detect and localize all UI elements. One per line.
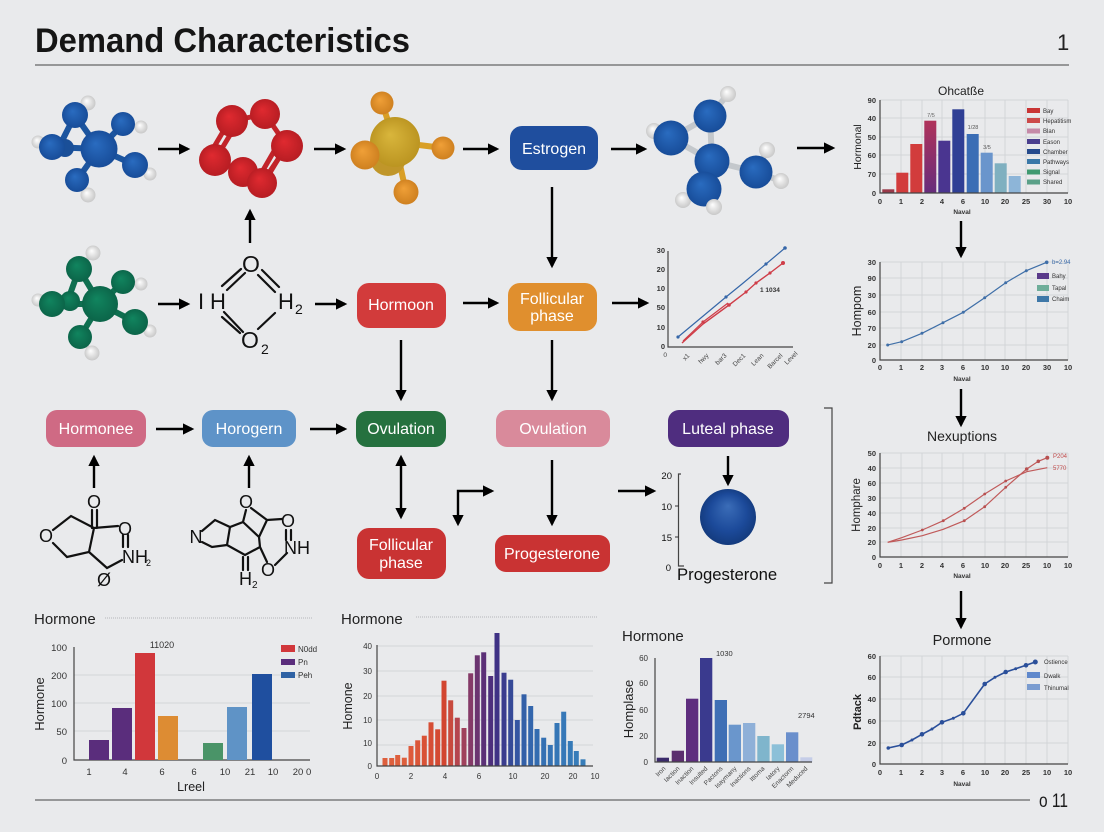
chart: bottom left bar chart: N0dd xyxy=(298,645,317,654)
progesterone gauge with sphere: 10 xyxy=(661,502,672,513)
chart: mini line chart: 50 xyxy=(657,303,665,312)
chart: top right bar chart: 90 xyxy=(868,96,876,105)
chart: top right bar chart: 60 xyxy=(868,151,876,160)
node: Luteal phase xyxy=(668,410,789,447)
chart: right line chart 2: 10 xyxy=(1001,363,1009,372)
chart: bottom left bar chart: 11020 xyxy=(150,640,174,650)
chart: top right bar chart: Naval xyxy=(953,209,971,216)
chart: bottom middle histogram: 2 xyxy=(409,772,414,781)
chart: top right bar chart: 6 xyxy=(961,197,965,206)
structure: right ring: H xyxy=(239,569,252,589)
structure: O H H2 O2: 2 xyxy=(295,301,303,317)
chart: bottom left bar chart: 10 xyxy=(220,767,230,778)
chart: top right bar chart: Signal xyxy=(1043,170,1060,176)
chart: bottom left bar chart: 20 0 xyxy=(293,767,311,778)
chart: bottom right bar chart: 2794 xyxy=(798,711,815,720)
structure: left ring xyxy=(39,492,151,590)
structure: right ring xyxy=(190,492,310,591)
chart: bottom right bar chart: 60 xyxy=(639,706,649,715)
chart: mini line chart: hwy xyxy=(697,352,711,366)
structure: O H H2 O2: I xyxy=(198,289,204,314)
chart: bottom middle histogram: 10 xyxy=(363,739,373,748)
progesterone gauge with sphere: Progesterone xyxy=(677,565,777,584)
chart: bottom left bar chart: Hormone xyxy=(34,611,96,628)
chart: right line chart 2: 90 xyxy=(868,274,876,283)
chart: right line chart 4: 0 xyxy=(872,760,876,769)
chart: bottom middle histogram: 10 xyxy=(363,716,373,725)
chart: bottom right bar chart: 20 xyxy=(639,732,649,741)
chart: bottom middle histogram: 30 xyxy=(363,667,373,676)
chart: right line chart 4: Naval xyxy=(953,781,971,788)
chart: right line chart 3: 2 xyxy=(920,561,924,570)
chart: top right bar chart: Shared xyxy=(1043,180,1062,186)
footer page number: o 11 xyxy=(1039,790,1068,812)
chart: bottom right bar chart: Pactons xyxy=(703,765,725,787)
chart: right line chart 4: 6 xyxy=(961,768,965,777)
chart: top right bar chart: Ohcatße xyxy=(938,84,984,98)
chart: bottom right bar chart: Hormone xyxy=(622,628,684,645)
chart: top right bar chart: 30 xyxy=(1043,197,1051,206)
structure: left ring: O xyxy=(39,526,53,546)
node: Hormoon xyxy=(357,283,446,328)
chart: bottom left bar chart: 1 xyxy=(86,767,92,778)
molecule: blue xyxy=(32,96,156,202)
structure: O H H2 O2 xyxy=(198,251,303,357)
chart: mini line chart: Barcel xyxy=(766,352,785,370)
node: Horogern xyxy=(202,410,296,447)
chart: right line chart 3: Nexuptions xyxy=(927,428,997,444)
chart: bottom left bar chart: Pn xyxy=(298,658,308,667)
chart: right line chart 3: 1 xyxy=(899,561,903,570)
chart: top right bar chart: Hormonal xyxy=(852,124,864,170)
chart: bottom left bar chart: Peh xyxy=(298,671,312,680)
chart: right line chart 3: 30 xyxy=(868,494,876,503)
node: Follicular phase xyxy=(508,283,597,331)
node: Follicular phase red: phase xyxy=(379,555,423,572)
chart: right line chart 2: Chaim xyxy=(1052,297,1069,303)
chart: mini line chart: 30 xyxy=(657,246,665,255)
chart: top right bar chart: 70 xyxy=(868,170,876,179)
structure: O H H2 O2: 2 xyxy=(261,341,269,357)
chart: top right bar chart: 10 xyxy=(1064,197,1072,206)
chart: bottom right bar chart xyxy=(621,628,815,790)
node: Follicular phase red xyxy=(357,528,446,579)
chart: right line chart 3: 50 xyxy=(868,449,876,458)
chart: bottom left bar chart: 200 xyxy=(51,671,67,682)
chart: right line chart 2: 20 xyxy=(868,341,876,350)
structure: left ring: 2 xyxy=(146,558,151,568)
node: Luteal phase: Luteal phase xyxy=(682,421,774,438)
chart: bottom middle histogram: 4 xyxy=(443,772,448,781)
chart: bottom right bar chart: Ittoma xyxy=(749,765,767,783)
chart: top right bar chart: Bay xyxy=(1043,109,1053,115)
chart: top right bar chart: Eason xyxy=(1043,140,1060,146)
chart: right line chart 2: 60 xyxy=(868,308,876,317)
chart: right line chart 4: 0 xyxy=(878,768,882,777)
structure: O H H2 O2: O xyxy=(242,251,260,277)
node: Hormonee: Hormonee xyxy=(59,421,133,438)
chart: right line chart 4: Dwalk xyxy=(1044,674,1061,680)
chart: right line chart 4: Pormone xyxy=(933,633,991,649)
chart: top right bar chart: Blan xyxy=(1043,129,1055,135)
chart: right line chart 4: 3 xyxy=(940,768,944,777)
chart: top right bar chart: 0 xyxy=(872,189,876,198)
node: Hormoon: Hormoon xyxy=(368,297,434,314)
chart: right line chart 4: 2 xyxy=(920,768,924,777)
node: Ovulation pink xyxy=(496,410,610,447)
chart: right line chart 2: 2 xyxy=(920,363,924,372)
chart: right line chart 2: b=2.94 xyxy=(1052,260,1071,266)
chart: top right bar chart: 4 xyxy=(940,197,945,206)
chart: right line chart 2: Naval xyxy=(953,376,971,383)
chart: top right bar chart: 1 xyxy=(899,197,903,206)
chart: mini line chart: bar3 xyxy=(714,352,729,367)
chart: right line chart 2: 20 xyxy=(1022,363,1030,372)
chart: top right bar chart: 10 xyxy=(981,197,989,206)
chart: bottom middle histogram: 20 xyxy=(569,772,578,781)
chart: bottom right bar chart: Iron xyxy=(655,765,668,778)
page number: 1 xyxy=(1057,30,1069,55)
chart: right line chart 4: 10 xyxy=(1064,768,1072,777)
molecule: green xyxy=(32,246,156,360)
node: Hormonee xyxy=(46,410,146,447)
chart: top right bar chart: 1/28 xyxy=(968,125,978,131)
chart: mini line chart: 10 xyxy=(657,323,665,332)
chart: right line chart 3: P204 xyxy=(1053,454,1068,460)
chart: right line chart 3: 0 xyxy=(878,561,882,570)
node: Ovulation green: Ovulation xyxy=(367,421,435,438)
chart: bottom right bar chart: 0 xyxy=(644,758,649,767)
footer rule xyxy=(35,799,1030,801)
structure: left ring: O xyxy=(87,492,101,512)
chart: right line chart 3: Homphare xyxy=(851,478,863,532)
chart: right line chart 3 xyxy=(851,428,1072,580)
chart: right line chart 2: Tapal xyxy=(1052,286,1066,292)
chart: bottom right bar chart: Homplase xyxy=(621,680,636,738)
chart: right line chart 4: Thinumal xyxy=(1044,686,1069,692)
chart: right line chart 3: 20 xyxy=(1001,561,1009,570)
chart: right line chart 4: 20 xyxy=(868,739,876,748)
chart: top right bar chart: Chamber xyxy=(1043,150,1068,156)
node: Ovulation green xyxy=(356,411,446,447)
chart: bottom left bar chart: Lreel xyxy=(177,780,205,794)
chart: right line chart 2: 0 xyxy=(878,363,882,372)
chart: top right bar chart xyxy=(852,84,1072,216)
chart: right line chart 2: 6 xyxy=(961,363,965,372)
chart: bottom left bar chart: 4 xyxy=(122,767,128,778)
chart: right line chart 3: 6 xyxy=(961,561,965,570)
chart: bottom right bar chart: 60 xyxy=(639,679,649,688)
chart: bottom middle histogram: Hormone xyxy=(341,611,403,628)
structure: left ring: Ø xyxy=(97,570,111,590)
chart: right line chart 4: Ostience xyxy=(1044,660,1068,666)
chart: right line chart 3: 40 xyxy=(868,509,876,518)
structure: O H H2 O2: O xyxy=(241,327,259,353)
chart: bottom right bar chart: Iaction xyxy=(663,765,682,784)
chart: bottom left bar chart: 100 xyxy=(51,699,67,710)
chart: right line chart 2: 30 xyxy=(868,291,876,300)
chart: bottom right bar chart: Iatory xyxy=(765,765,782,782)
chart: top right bar chart: 3/5 xyxy=(983,145,991,151)
chart: mini line chart: Lean xyxy=(750,352,766,368)
chart: bottom right bar chart: 60 xyxy=(639,654,649,663)
chart: bottom middle histogram xyxy=(341,611,600,781)
chart: top right bar chart: 25 xyxy=(1022,197,1030,206)
chart: right line chart 3: 40 xyxy=(868,464,876,473)
molecule: gold xyxy=(350,92,454,204)
chart: right line chart 3: Naval xyxy=(953,573,971,580)
chart: bottom middle histogram: 20 xyxy=(541,772,550,781)
chart: bottom left bar chart xyxy=(32,611,317,794)
chart: right line chart 2: 10 xyxy=(1064,363,1072,372)
node: Follicular phase red: Follicular xyxy=(369,537,434,554)
chart: mini line chart: 0 xyxy=(661,342,665,351)
chart: right line chart 4: 40 xyxy=(868,695,876,704)
chart: right line chart 3: 10 xyxy=(981,561,989,570)
structure: right ring: NH xyxy=(284,538,310,558)
title: Demand Characteristics xyxy=(35,22,410,60)
chart: right line chart 3: 4 xyxy=(940,561,945,570)
chart: bottom left bar chart: 21 xyxy=(245,767,255,778)
chart: bottom left bar chart: 50 xyxy=(56,727,67,738)
chart: top right bar chart: 40 xyxy=(868,114,876,123)
molecule: red ring xyxy=(199,99,303,198)
chart: right line chart 2: 1 xyxy=(899,363,903,372)
structure: right ring: O xyxy=(281,511,295,531)
chart: mini line chart: Dec1 xyxy=(732,352,748,368)
chart: bottom middle histogram: Homone xyxy=(341,682,355,730)
node: Ovulation pink: Ovulation xyxy=(519,421,587,438)
structure: O H H2 O2: H xyxy=(210,289,226,314)
structure: O H H2 O2: H xyxy=(278,289,294,314)
node: Follicular phase: Follicular xyxy=(520,291,585,308)
chart: mini line chart: 0 xyxy=(663,352,667,359)
node: Estrogen xyxy=(510,126,598,170)
chart: bottom left bar chart: Hormone xyxy=(32,677,47,731)
chart: top right bar chart: Hepatitism xyxy=(1043,119,1071,125)
structure: right ring: O xyxy=(261,560,275,580)
chart: right line chart 2: 10 xyxy=(981,363,989,372)
chart: bottom right bar chart: Isaymany xyxy=(714,765,739,790)
arrows xyxy=(94,148,961,627)
chart: right line chart 2: 30 xyxy=(1043,363,1051,372)
chart: mini line chart: 1 1034 xyxy=(760,287,780,294)
chart: bottom middle histogram: 20 xyxy=(363,692,373,701)
chart: mini line chart: x1 xyxy=(682,352,692,362)
chart: top right bar chart: 2 xyxy=(920,197,924,206)
chart: bottom middle histogram: 6 xyxy=(477,772,482,781)
chart: top right bar chart: 20 xyxy=(1001,197,1009,206)
structure: right ring: 2 xyxy=(252,580,258,591)
node: Follicular phase: phase xyxy=(530,308,574,325)
chart: bottom right bar chart: Inactions xyxy=(729,765,753,789)
chart: right line chart 4: 20 xyxy=(1001,768,1009,777)
chart: right line chart 3: 60 xyxy=(868,479,876,488)
chart: right line chart 4: 60 xyxy=(868,652,876,661)
chart: mini line chart xyxy=(657,246,800,370)
progesterone gauge with sphere: 0 xyxy=(666,563,671,574)
chart: bottom middle histogram: 0 xyxy=(368,762,373,771)
chart: right line chart 3: 5770 xyxy=(1053,466,1067,472)
chart: top right bar chart: 0 xyxy=(878,197,882,206)
chart: bottom right bar chart: Inaction xyxy=(674,765,696,787)
progesterone gauge with sphere: 20 xyxy=(661,471,672,482)
chart: right line chart 4: 1 xyxy=(899,768,903,777)
chart: bottom left bar chart: 6 xyxy=(159,767,165,778)
node: Horogern: Horogern xyxy=(216,421,282,438)
chart: bottom left bar chart: 10 xyxy=(268,767,278,778)
structure: right ring: N xyxy=(190,527,202,547)
node: Progesterone: Progesterone xyxy=(504,546,600,563)
chart: mini line chart: 20 xyxy=(657,265,665,274)
molecule: blue and white xyxy=(646,86,789,215)
chart: mini line chart: Level xyxy=(783,350,800,366)
chart: bottom right bar chart: 1030 xyxy=(716,649,733,658)
chart: bottom right bar chart: Insulted xyxy=(688,765,710,787)
chart: top right bar chart: Pathways xyxy=(1043,160,1069,166)
structure: left ring: O xyxy=(118,519,132,539)
chart: top right bar chart: 7/5 xyxy=(927,113,935,119)
progesterone gauge with sphere xyxy=(661,471,777,584)
chart: bottom middle histogram: 40 xyxy=(363,642,373,651)
chart: right line chart 2: Hompom xyxy=(850,286,864,336)
chart: bottom right bar chart: Enactorm xyxy=(771,765,795,790)
node: Estrogen: Estrogen xyxy=(522,141,586,158)
chart: bottom right bar chart: Meduced xyxy=(786,765,810,789)
structure: right ring: O xyxy=(239,492,253,512)
progesterone gauge with sphere: 15 xyxy=(661,533,672,544)
chart: right line chart 2: 70 xyxy=(868,324,876,333)
chart: right line chart 4: 10 xyxy=(981,768,989,777)
structure: left ring: NH xyxy=(122,547,148,567)
chart: top right bar chart: 50 xyxy=(868,133,876,142)
chart: bottom middle histogram: 0 xyxy=(375,772,380,781)
chart: bottom left bar chart: 100 xyxy=(51,643,67,654)
chart: right line chart 3: 0 xyxy=(872,553,876,562)
chart: right line chart 2: 3 xyxy=(940,363,944,372)
chart: right line chart 4: 25 xyxy=(1022,768,1030,777)
chart: right line chart 4: Pdtack xyxy=(852,693,864,730)
chart: bottom left bar chart: 0 xyxy=(62,756,67,767)
chart: right line chart 3: 20 xyxy=(868,524,876,533)
chart: bottom middle histogram: 10 xyxy=(509,772,518,781)
chart: right line chart 3: 10 xyxy=(1064,561,1072,570)
chart: right line chart 3: 20 xyxy=(868,538,876,547)
chart: right line chart 3: 25 xyxy=(1022,561,1030,570)
chart: bottom middle histogram: 10 xyxy=(591,772,600,781)
chart: right line chart 4: 60 xyxy=(868,673,876,682)
chart: right line chart 2: 30 xyxy=(868,258,876,267)
chart: right line chart 2: 0 xyxy=(872,356,876,365)
chart: right line chart 2: Bahy xyxy=(1052,274,1066,280)
chart: right line chart 4: 60 xyxy=(868,717,876,726)
chart: right line chart 4: 10 xyxy=(1043,768,1051,777)
chart: right line chart 3: 10 xyxy=(1043,561,1051,570)
chart: bottom left bar chart: 6 xyxy=(191,767,197,778)
bracket xyxy=(824,408,832,583)
node: Progesterone xyxy=(495,535,610,572)
chart: right line chart 2 xyxy=(850,258,1072,383)
chart: right line chart 4 xyxy=(852,633,1072,788)
chart: mini line chart: 10 xyxy=(657,284,665,293)
